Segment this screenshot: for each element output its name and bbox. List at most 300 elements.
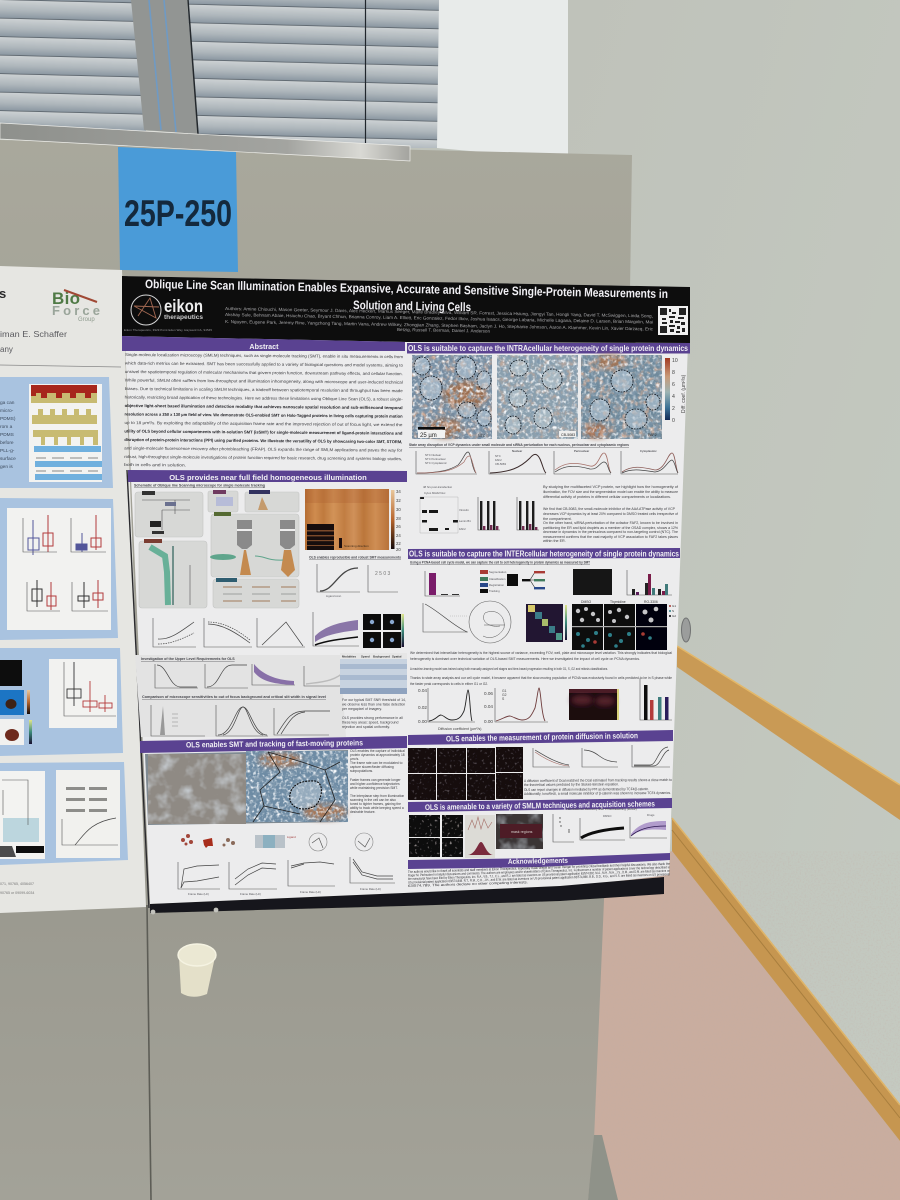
model heading: Using a PCNA-based cell cycle model, we can capture the cell to cell heterogeneity in protein dynamics as measured by SMT (410, 560, 591, 564)
abstract heading band (122, 336, 405, 351)
western blot (420, 485, 471, 533)
panel: INTERcellular heterogeneity (408, 548, 680, 731)
axes (23, 518, 108, 611)
panel: abstract (122, 336, 405, 469)
western blot: CytoL MitoM Nuc (424, 491, 446, 495)
sensitivity heading: Comparison of microscope sensitivities to out of focus background and critical slit width in signal level (142, 695, 326, 699)
tracking circle 2 (355, 833, 373, 851)
inset (307, 524, 334, 550)
affiliation fragment: any (0, 345, 13, 354)
right wall (568, 0, 900, 1200)
panel: box plots A (0, 498, 118, 640)
chart 3: Frame Rate (Hz) (300, 890, 321, 894)
poster mounting screws (151, 908, 218, 914)
schematic A (135, 491, 203, 537)
phase legend: G1 (672, 604, 676, 608)
light background: upper level requirements (135, 655, 346, 737)
colour scale labels: 22 (396, 541, 401, 546)
diffusion text: OLS can report changes in diffusion mediated by PPI as demonstrated by TCF4/β-catenin. (524, 787, 649, 792)
colour bar ticks: 8 (672, 370, 675, 376)
abstract heading: Abstract (249, 342, 279, 351)
table header: Modalities (342, 654, 357, 658)
scale marker (339, 538, 342, 548)
micrograph NTC (412, 355, 492, 439)
acknowledgement text: 63/574,789. The authors declare no other competing interests. (408, 880, 528, 888)
conclusions text (342, 698, 406, 729)
diffusion distribution 2 (484, 688, 548, 724)
top rail (0, 123, 410, 161)
blue session number sign (118, 147, 238, 272)
flow cell (255, 835, 285, 848)
nuclei outlines (414, 357, 491, 426)
abstract body text: robust, high-throughput single-molecule investigations of protein function required for basic research, drug screening and systems biology studies, (124, 454, 402, 461)
section band (128, 470, 407, 482)
schematic subheading: Schematic of Oblique line Scanning microscope for single molecule tracking (134, 484, 265, 488)
chart 3 (288, 860, 335, 894)
table header: Speed (361, 654, 370, 658)
findings text: decrease in dynamics in the perinucleus compared to non-targeting control (NTC). The (543, 530, 678, 534)
panel: SMLM techniques (408, 798, 672, 858)
decay chart (155, 664, 198, 688)
cell cycle legend (480, 570, 507, 593)
phase bars (627, 570, 672, 595)
sample size curve (423, 603, 468, 632)
diffusion distribution 1: Diffusion coefficient (µm²/s) (438, 727, 481, 731)
conclusions text: we observe less than one false detection (342, 702, 405, 706)
acknowledgement text: Roger M. Perlmutter for helpful discussions and comments. The authors are employees and/or shareholders of Eikon Therapeutics, Inc. Furthermore a number of patent applications cover the technology described in (408, 865, 670, 877)
abstract body text: historically, restricting broad application of these technologies. Here we address these limitations using Oblique Line Scan (OLS), a robust single- (125, 394, 403, 402)
SMT findings text: subpopulations. (350, 769, 373, 773)
abstract body text: and single-molecule fluorescence recovery after photobleaching (FRAP). OLS expands the range of SMLM applications and paves the way for (124, 445, 403, 453)
protein cluster 3 (222, 838, 235, 846)
table header (342, 654, 402, 658)
wall fixture (682, 618, 690, 642)
chart: dots: 2 5 0 3 (375, 571, 391, 577)
display board (0, 123, 632, 1200)
panel: box plots B (0, 648, 123, 756)
therapeutics wordmark: therapeutics (164, 314, 204, 321)
overall distribution: NTC Perinuclear (425, 457, 446, 461)
green beam (210, 554, 236, 560)
text fragments: gen is (0, 464, 13, 470)
section heading: Acknowledgements (508, 856, 568, 866)
chart 1: Frame Rate (Hz) (188, 892, 209, 896)
SMT findings text: The frame rate can be modulated to (350, 761, 403, 765)
text fragments: micro- (0, 408, 14, 414)
session number: 25P-250 (124, 193, 232, 234)
colour scale labels: 24 (396, 533, 401, 538)
objective right (280, 520, 295, 549)
scale bar (418, 427, 445, 430)
findings text: differential activity of proteins in different cellular compartments or localizations. (543, 495, 671, 499)
nuclei outlines (505, 360, 562, 434)
frame blue streaks (149, 0, 176, 132)
chart 4: photobleach band (313, 612, 359, 646)
colour bar ticks: 2 (672, 406, 675, 412)
findings text: illumination, the FOV size and the segmentation model can enable the ability to measure (543, 490, 678, 494)
distribution heading: State array disruption of VCP dynamics under small molecule and siRNA perturbation for each nucleus, perinuclear and cytoplasmic regions (409, 443, 629, 447)
SMT findings text: OLS enables the capture of individual (350, 749, 405, 753)
conclusions text: these key areas: speed, background (342, 720, 398, 724)
condition label NTC: NTC (478, 434, 486, 438)
objective left (237, 520, 252, 549)
findings text (543, 485, 679, 543)
schematic D (139, 539, 207, 608)
SMT findings text: Faster frames can generate longer (350, 778, 401, 782)
section band (408, 853, 670, 869)
carpet floor (588, 851, 900, 1200)
upper rail highlight (677, 646, 900, 785)
upper level requirements heading: Investigation of the Upper Level Requirements for OLS (141, 657, 235, 661)
footer fragments: 071, 90765, 4056407 (0, 882, 34, 886)
section band (407, 343, 690, 354)
section band (408, 548, 680, 559)
findings text: heterogeneity is dominant over technical variation of OLS-based SMT measurements. Here we investigated the impact of cell cycle on PCNA dynamics. (410, 657, 640, 661)
schematic F (213, 578, 299, 608)
colour scale labels: 28 (396, 516, 401, 521)
overall distribution (416, 451, 477, 474)
requirements table (340, 653, 407, 694)
findings text: the compartment. (543, 517, 572, 521)
variance bar chart (425, 571, 460, 596)
header banner (122, 276, 690, 343)
diffusion distribution 2: 0.04 (484, 704, 493, 709)
tracking circle 1 (309, 833, 327, 851)
bell curves (216, 705, 268, 736)
treatment labels: DMSO (581, 600, 592, 604)
findings text: measurement confirms that the vast majority of VCP association to FAF2 takes places (543, 535, 678, 539)
protein cluster 1 (181, 834, 193, 846)
colour bar ticks: 0 (672, 418, 675, 424)
left edge shadow (127, 470, 149, 908)
carpet grain (588, 851, 900, 1200)
findings text: On the other hand, siRNA perturbation of the cofactor FAF2, known to be involved in (543, 521, 678, 525)
chart: dose response sigmoid: Ligand conc. (326, 594, 342, 598)
chart 4 (350, 857, 395, 891)
curve and schematic area (56, 770, 120, 858)
diffusion distribution 2: G1 (502, 689, 507, 693)
diffusion distribution 2: G2 (502, 693, 507, 697)
main poster (122, 276, 690, 914)
box plots (28, 515, 103, 610)
acknowledgement text: the manuscript have been filed by Eikon Therapeutics, Inc. R.A., V.B., T.J., C.L., and R.J. are listed as inventors on US provisional patent application 63/574,892. M.A., M.H., M.H., J.S., D.M., and D.M. are listed as inventors on (408, 869, 670, 881)
diffusion distribution 1: 0.00 (418, 719, 427, 724)
acknowledgement text (408, 862, 670, 888)
cell boundaries (253, 752, 340, 822)
lower wooden rail (672, 818, 900, 1141)
colour scale labels: 26 (396, 524, 401, 529)
schematic B (208, 490, 238, 512)
reproducibility heading: OLS enables reproducible and robust SMT measurements (309, 556, 401, 560)
BioForce group logo: Group (78, 317, 95, 323)
findings text: the faster peak corresponds to cells in either G1 or G2. (410, 682, 488, 686)
flow labels: Ligand (287, 835, 296, 839)
conclusions text: rejection and spatial uniformity. (342, 725, 390, 729)
section band (408, 730, 673, 745)
nucleus outline (290, 781, 321, 809)
diffusion text: the theoretical values predicted by the Stokes-Einstein equation. (524, 782, 619, 787)
conclusions text: per megapixel of imagery. (342, 707, 382, 711)
title: Oblique Line Scan Illumination Enables Expansive, Accurate and Sensitive Single-Protein Measurements in (145, 277, 668, 301)
panel: acknowledgements (408, 853, 670, 888)
abstract body text: disruption of protein-protein interactions (PPI) using purified proteins. We illustrate the versatility of OLS by showcasing two-color SMT, STORM, (124, 437, 402, 444)
abstract body text: resolution across a 250 x 130 µm field of view. We demonstrate OLS-enabled SMT on Halo-Tagged proteins in living cells capturing protein motion (125, 411, 403, 419)
findings text: We determined that intercellular heterogeneity is the highest source of variance, exceeding FOV, well, plate and microscope level variation. This strongly indicates that biological (410, 651, 672, 655)
neighbouring poster, left (0, 266, 146, 913)
section band (408, 798, 672, 812)
schematic layers (66, 787, 107, 812)
colour bar ticks: 6 (672, 382, 675, 388)
findings text: decreases VCP dynamics by at least 20% compared to DMSO treated cells irrespective of (543, 512, 679, 516)
pale wall column (437, 0, 570, 160)
schematic C (245, 490, 299, 512)
BioForce group logo: Force (52, 303, 100, 318)
findings text (410, 651, 672, 686)
SMT findings text: while maintaining precision SMT. (350, 786, 398, 790)
STORM images (409, 815, 463, 857)
SMT findings text: desirable feature. (350, 810, 376, 814)
chart 2 (204, 618, 252, 647)
abstract body text: utility of OLS beyond cellular compartments with in-solution SMT (isSMT) for single-molecule measurement of ligand-protein interactions and (124, 428, 403, 436)
text fragments: PDMS) (0, 416, 16, 422)
acknowledgement text: US provisional patent application 63/574,848. R.T., R.M., C.H., J.H., and E.W. are listed as inventors on US provisional patent application 63/574,866. B.B., D.D., K.G., and S.S. are listed as inventors on US provisional (408, 872, 670, 884)
average diffusion bars (640, 678, 672, 720)
protein cluster 2 (203, 838, 213, 848)
western blot: Vinculin (459, 508, 469, 512)
colour scale labels: 20 (396, 547, 401, 552)
diffusion distribution 1 (418, 688, 481, 731)
nuclear: NTC (495, 454, 501, 458)
peak chart (151, 705, 205, 736)
axes (64, 662, 116, 716)
title line 2: Solution and Living Cells (353, 298, 471, 314)
purple decay band (252, 664, 295, 685)
panel: microcontact fabrication (0, 377, 113, 488)
diffusion distribution 2: S (502, 697, 505, 701)
poster sheet (122, 276, 690, 904)
text fragments: PDMS (0, 432, 14, 438)
colour scale labels: 34 (396, 489, 401, 494)
overall distribution: NTC Nuclear (425, 453, 441, 457)
text fragments: before (0, 440, 14, 446)
QR code (658, 306, 688, 335)
SMT findings text: capture slower/faster diffusing (350, 765, 394, 769)
cord (364, 0, 366, 143)
raw cell image (573, 569, 612, 595)
box plots (67, 662, 112, 712)
microscopy thumbnail (0, 660, 22, 686)
authors: Betzig, Russell T. Berman, Daniel J. Anderson (397, 327, 491, 334)
text fragments: ga can (0, 401, 15, 406)
cell cycle legend: Segmentation (489, 570, 507, 574)
FRAP curve drug (630, 813, 667, 838)
chart: concentration titration (582, 748, 618, 767)
frame dark edge (188, 0, 198, 134)
SMT findings text (350, 749, 405, 814)
section heading: OLS is amenable to a variety of SMLM techniques and acquisition schemes (425, 799, 655, 812)
FRAP curve DMSO (580, 814, 625, 840)
table header: Background (373, 654, 390, 658)
findings text: partitioning the ER and lipid droplets as a member of the OSAD complex, shows a 12% (543, 526, 679, 530)
printed lines (36, 458, 98, 471)
text fragments: surface (0, 456, 16, 462)
colour bar title: Diff. coef. (µm²/s) (681, 374, 687, 413)
micrograph FAF2 (581, 355, 662, 439)
findings text: By studying the multifaceted VCP protein, we highlight how the homogeneity of (543, 485, 679, 489)
authors: K. Nguyen, Eugene Park, Jeremy Rine, Yangzhong Tang, Martin Vana, Andrew Wilkey, Zhongjian Zhang, Stephen Basham, Jaclyn J. Ho, Stephanie Johnson, Aaron A. Klammer, Kevin Lin, Xavier Darzacq, Eric (225, 319, 654, 331)
cell cycle legend: Classification (489, 577, 506, 581)
diffusion text: Additionally, IonoRecti, a small molecule inhibitor of β-catenin was shown to increase TCF4 dynamics. (524, 791, 671, 796)
chart row 2 (155, 664, 347, 688)
phase legend (669, 604, 676, 618)
fraction bar chart 1 (478, 497, 500, 530)
colour scales (27, 690, 30, 714)
diffusion text: A diffusion coefficient of Dcal matched the Dcal estimated from tracking results shows a close match to (524, 778, 672, 783)
section heading: OLS enables SMT and tracking of fast-moving proteins (186, 738, 364, 749)
orange beams (240, 550, 251, 575)
western blot: Lamin B1 (459, 519, 471, 523)
text fragments: PLL-g- (0, 448, 15, 454)
window blinds centre (188, 0, 444, 148)
panel: protein diffusion in solution (408, 730, 673, 800)
nuclear: FAF2 (495, 458, 502, 462)
plot area (7, 508, 111, 630)
SMT findings text: µm²/s. (350, 757, 359, 761)
overall distribution: NTC Cytoplasmic (425, 461, 447, 465)
cup rim (178, 944, 216, 966)
treatment labels: RO-3306 (644, 600, 658, 604)
chart row 3 (151, 705, 330, 736)
PSF images (363, 614, 404, 648)
nuclear: CB-5083 (495, 462, 506, 466)
abstract body text: Single-molecule localization microscopy (SMLM) techniques, such as single-molecule tracking (SMT), enable in situ measurements in cells from (125, 352, 404, 359)
conclusions text: For our typical SMT SNR threshold of 14, (342, 698, 406, 702)
micrograph CB-5083 (497, 355, 578, 439)
FRAP curve DMSO: DMSO (603, 814, 612, 818)
stamp step 2 (32, 409, 97, 424)
chart: size vs diffusion (533, 748, 570, 767)
SMT findings text: protein dynamics at approximately 18 (350, 753, 405, 757)
nuclear (489, 449, 546, 474)
BioForce group logo: Bio (52, 289, 80, 308)
window frame (131, 0, 198, 134)
diffusion distribution 2: 0.06 (484, 691, 493, 696)
SMT findings text: scanning in the cell can be also (350, 798, 396, 802)
western blot: 48 hrs post-transfection (423, 485, 453, 489)
upper wooden rail (677, 646, 900, 820)
text fragments (0, 401, 16, 470)
neighbouring poster, left: 90765 or 09099-6034 (0, 891, 34, 895)
colour bar ticks: 10 (672, 358, 678, 364)
section heading: OLS is suitable to capture the INTERcellular heterogeneity of single protein dynamics (409, 550, 679, 558)
state heat map (569, 689, 619, 720)
authors: Akshay Sule, Behnam Abaie, Hsiuchu Chao, Bryant Chhun, Brianna Conroy, Liam A. Elliott, Eric Gonzalez, Fedor Ilkov, Joshua Isaacs, George Labaria, Michelle Lagana, Delaine D. Larsen, Brian Margolin, Mai (225, 312, 653, 324)
FRAP curve drug: Drugs (647, 813, 655, 817)
phase legend: S (672, 609, 674, 613)
bright nuclei (576, 607, 658, 623)
micrograph CB-5083: CB-5083 (561, 433, 575, 437)
scanning direction label: Scanning direction (344, 544, 369, 548)
colour bar ticks: 4 (672, 394, 675, 400)
treatment labels: Thymidine (610, 600, 626, 604)
dot plot (553, 814, 574, 842)
abstract body text (124, 352, 404, 469)
colour scale (391, 490, 394, 549)
western blot: FAF2 (459, 527, 466, 531)
chart 2: Frame Rate (Hz) (240, 892, 261, 896)
colour scale labels: 30 (396, 507, 401, 512)
board foot (588, 1135, 618, 1200)
diffusion distribution 2: 0.00 (484, 719, 493, 724)
abstract body text: unravel the spatiotemporal regulation of molecular mechanisms that govern protein function, downstream pathway effects, and cellular function. (125, 369, 403, 376)
findings text: Thanks to state array analysis and our cell cycle model, it became apparent that the slow-moving population of PCNA was exclusively found in cells predicted to be in S phase while (410, 676, 672, 680)
colour scale labels (396, 489, 401, 552)
findings text: We find that CB-5083, the small-molecule inhibitor of the AAA ATPase activity of VCP (543, 507, 676, 511)
confusion matrix (526, 604, 567, 642)
phase legend: G2 (672, 614, 676, 618)
findings text: A machine-learning model was trained using both manually assigned cell stages and time-based progression resulting in both G1, S, G2 and mitosis classifications. (410, 667, 608, 671)
FRAP subheading: Fluorescence Recovery after Photobleaching (FRAP) (566, 807, 637, 811)
cell image and classification arrows (507, 571, 545, 589)
cell cycle legend: Tracking (489, 589, 500, 593)
cup body (179, 957, 215, 997)
findings text: within the ER. (543, 539, 566, 543)
mask regions image (496, 814, 543, 849)
colour bar ticks (672, 358, 678, 424)
section heading: OLS enables the measurement of protein diffusion in solution (446, 731, 638, 743)
eikon logo mark (131, 295, 161, 325)
window blinds left (0, 0, 146, 132)
stamp step 1 (31, 392, 97, 403)
table header: Spatial (392, 654, 402, 658)
chart: dose response sigmoid (317, 564, 360, 598)
abstract body text: up to 18 µm²/s. By exploiting the adaptability of the acquisition frame rate and the improved rejection of out of focus light, we extend the (124, 420, 403, 427)
paper cup on board (178, 944, 216, 997)
schematic E: objectives (210, 512, 299, 577)
eikon wordmark: eikon (164, 296, 203, 316)
panel: INTRAcellular heterogeneity (407, 343, 690, 543)
rise chart (205, 664, 248, 688)
section heading: OLS is suitable to capture the INTRAcellular heterogeneity of single protein dynamics (408, 344, 688, 353)
abstract body text: both in cells and in solution. (124, 462, 186, 467)
lower rail highlight (672, 818, 900, 1105)
chart 3 (257, 618, 305, 647)
chart 1 (153, 618, 196, 647)
stamp step 3 (33, 430, 98, 445)
molecular schematics (181, 833, 373, 851)
perinuclear: Perinuclear (574, 449, 590, 453)
SMT findings text: tuned to tighter frames, gaining the (350, 802, 401, 806)
chart 4: Frame Rate (Hz) (360, 887, 381, 891)
nuclear: Nuclear (512, 449, 523, 453)
chart 2 (229, 862, 277, 896)
abstract body text: which data-rich metrics can be extracted. SMT has been successfully applied to a variety of biological questions and model systems, aiming to (125, 360, 404, 368)
abstract body text: biases. Due to technical limitations in scaling SMLM techniques, a tradeoff between spatiotemporal resolution and throughput has been made (125, 386, 404, 393)
frame rate charts (178, 857, 395, 896)
blue thumbnail (0, 690, 24, 715)
panel: flow setup (0, 762, 128, 865)
mask regions image: mask regions (511, 830, 533, 834)
treatment image grid (572, 600, 676, 650)
BioForce group logo (52, 289, 100, 323)
chart: dots (368, 565, 398, 592)
diffusion text (524, 778, 672, 796)
colour bar (665, 358, 687, 424)
setup sketch (0, 771, 45, 859)
cytoplasmic: Cytoplasmic (640, 449, 657, 453)
fraction bar chart 2 (517, 497, 539, 530)
chart row: power series (153, 612, 404, 648)
